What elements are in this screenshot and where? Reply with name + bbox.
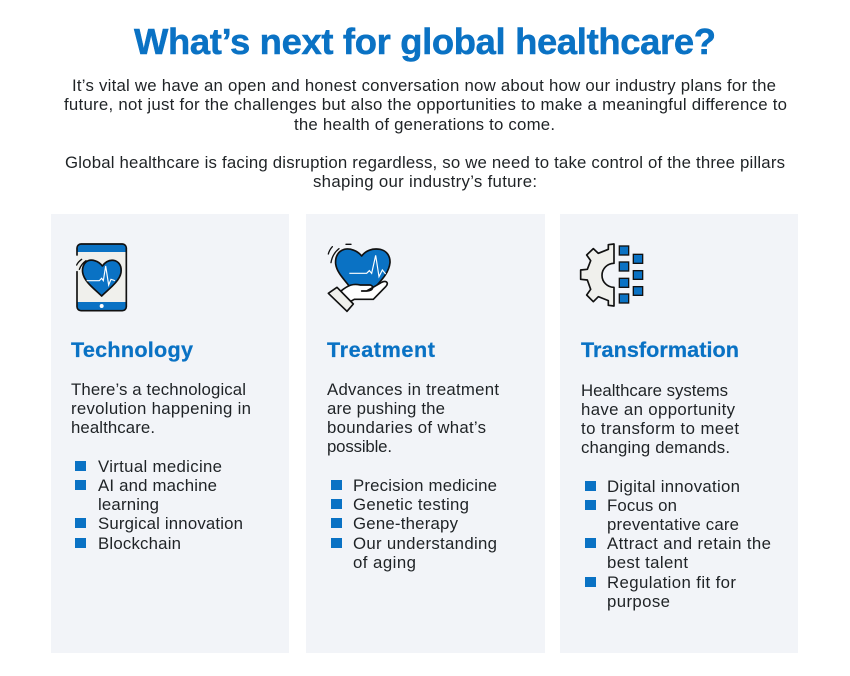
icon: tablet with heart — [77, 244, 126, 311]
heading: transformation: Transformation — [581, 337, 739, 362]
treatment bullet list: Precision medicine — [353, 476, 497, 495]
treatment bullet list: Gene-therapy — [353, 514, 459, 533]
transformation description: changing demands. — [581, 438, 730, 457]
panel: technology — [51, 214, 289, 653]
intro text: future, not just for the challenges but also the opportunities to make a meaningful difference to — [64, 95, 787, 114]
intro text: Global healthcare is facing disruption regardless, so we need to take control of the three pillars — [65, 153, 785, 172]
transformation bullet list: Regulation fit for — [607, 573, 736, 592]
technology bullet list: Virtual medicine — [98, 457, 222, 476]
treatment bullet list: Genetic testing — [353, 495, 469, 514]
heading: treatment: Treatment — [327, 337, 435, 362]
technology description: revolution happening in — [71, 399, 251, 418]
intro text — [64, 76, 787, 191]
transformation bullet list: Focus on — [607, 496, 677, 515]
treatment description — [327, 380, 499, 456]
panel: transformation — [560, 214, 798, 653]
transformation bullet list — [585, 477, 771, 611]
technology description: healthcare. — [71, 418, 155, 437]
technology bullet list: learning — [98, 495, 159, 514]
transformation description: Healthcare systems — [581, 381, 728, 400]
treatment bullet list: Our understanding — [353, 534, 497, 553]
intro text: shaping our industry’s future: — [313, 172, 537, 191]
technology bullet list: Blockchain — [98, 534, 181, 553]
technology bullet list: AI and machine — [98, 476, 217, 495]
title: What’s next for global healthcare? — [134, 21, 716, 62]
treatment description: Advances in treatment — [327, 380, 499, 399]
transformation bullet list: purpose — [607, 592, 670, 611]
icon: half gear with data squares — [581, 244, 643, 306]
transformation bullet list: best talent — [607, 553, 688, 572]
transformation bullet list: preventative care — [607, 515, 739, 534]
treatment bullet list — [331, 476, 497, 572]
transformation description: to transform to meet — [581, 419, 739, 438]
transformation description — [581, 381, 739, 457]
panel: treatment — [306, 214, 545, 653]
technology description — [71, 380, 251, 437]
icon: heart in hand — [328, 244, 390, 311]
treatment description: boundaries of what’s — [327, 418, 486, 437]
transformation bullet list: Attract and retain the — [607, 534, 771, 553]
technology bullet list: Surgical innovation — [98, 514, 243, 533]
technology description: There’s a technological — [71, 380, 246, 399]
transformation bullet list: Digital innovation — [607, 477, 740, 496]
intro text: It’s vital we have an open and honest conversation now about how our industry plans for the — [72, 76, 776, 95]
treatment description: are pushing the — [327, 399, 445, 418]
transformation description: have an opportunity — [581, 400, 736, 419]
heading: technology: Technology — [71, 337, 193, 362]
treatment bullet list: of aging — [353, 553, 416, 572]
treatment description: possible. — [327, 437, 392, 456]
technology bullet list — [75, 457, 243, 553]
intro text: the health of generations to come. — [294, 115, 555, 134]
